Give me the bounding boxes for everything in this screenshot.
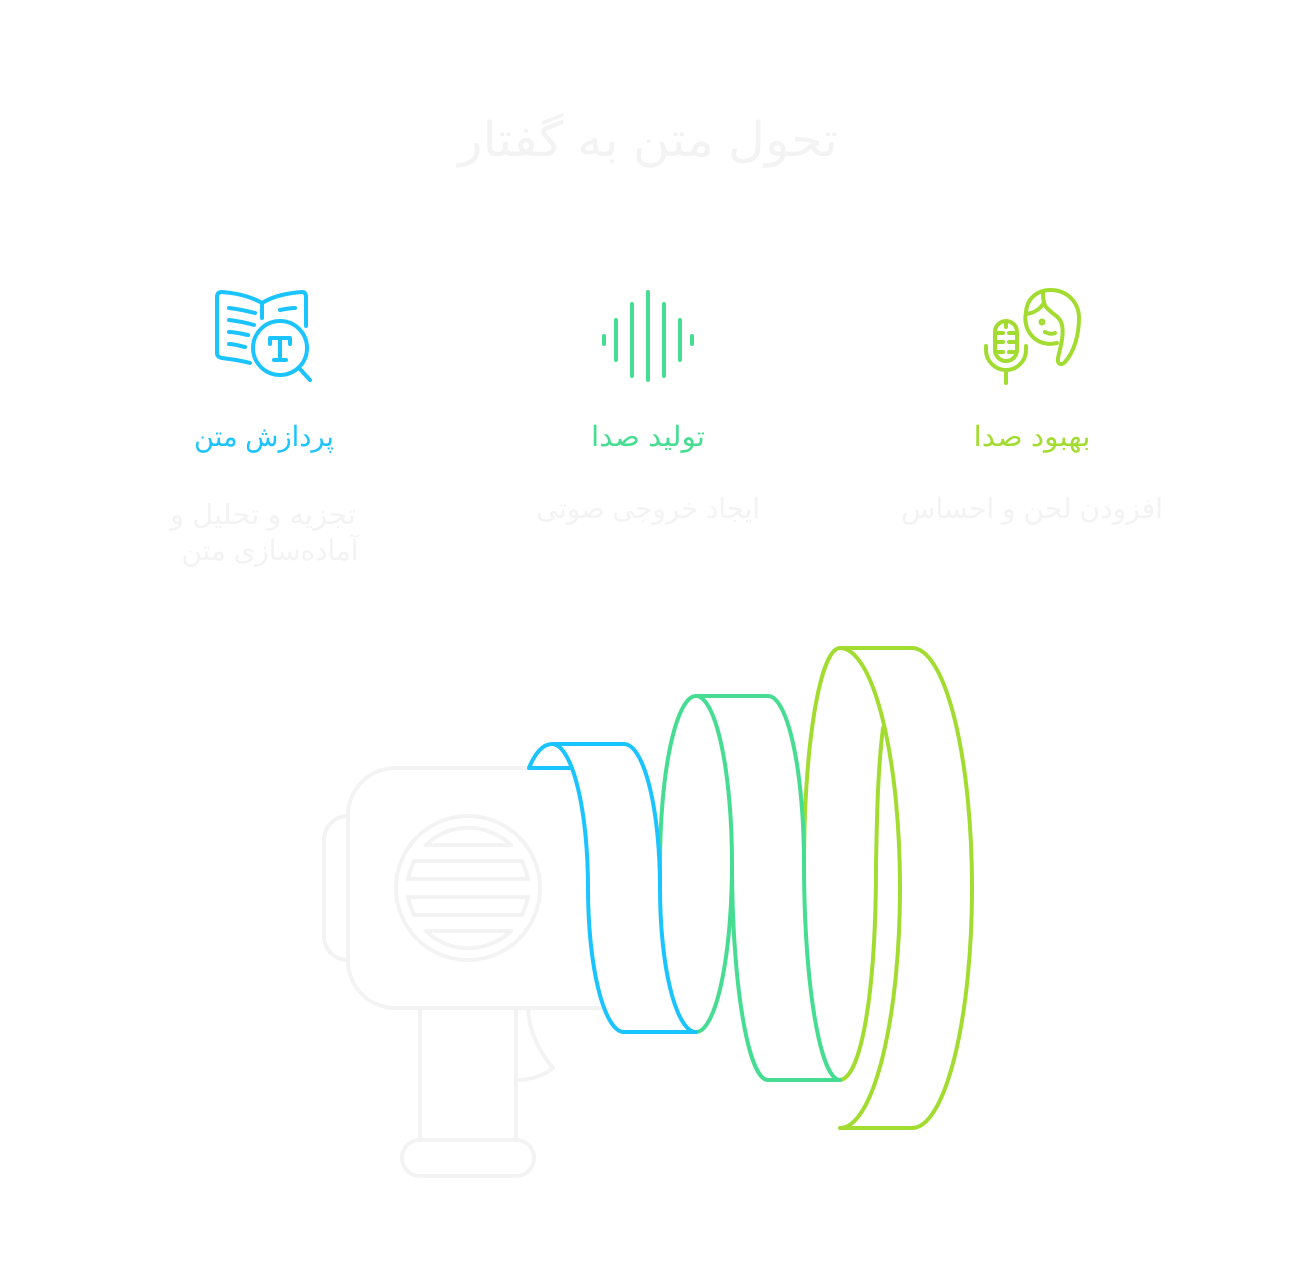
description: text processing: آماده‌سازی متن (182, 533, 360, 567)
heading: voice enhancement: بهبود صدا (974, 421, 1090, 453)
heading: text processing: پردازش متن (194, 421, 334, 453)
icon: sound wave (604, 292, 692, 380)
description: text processing (168, 499, 360, 567)
handle (420, 1008, 516, 1140)
megaphone body (348, 768, 602, 1008)
column: voice enhancement (901, 290, 1163, 525)
sound wave: blue ribbon (529, 744, 696, 1032)
icon: book with magnifier (217, 292, 310, 380)
sound wave: lime ribbon (804, 648, 972, 1128)
foot (402, 1140, 534, 1176)
trigger (516, 1008, 553, 1080)
back cap (324, 816, 348, 960)
illustration: megaphone (324, 768, 602, 1176)
title: تحول متن به گفتار (456, 112, 838, 168)
description: voice enhancement: افزودن لحن و احساس (901, 493, 1163, 525)
sound wave: green ribbon (660, 696, 840, 1080)
column: speech generation (536, 292, 760, 525)
heading: speech generation: تولید صدا (591, 421, 705, 453)
column: text processing (168, 292, 360, 567)
icon: woman and microphone (986, 290, 1079, 383)
description: text processing: تجزیه و تحلیل و (168, 499, 356, 531)
description: speech generation: ایجاد خروجی صوتی (536, 493, 760, 525)
speaker grille (396, 816, 540, 960)
